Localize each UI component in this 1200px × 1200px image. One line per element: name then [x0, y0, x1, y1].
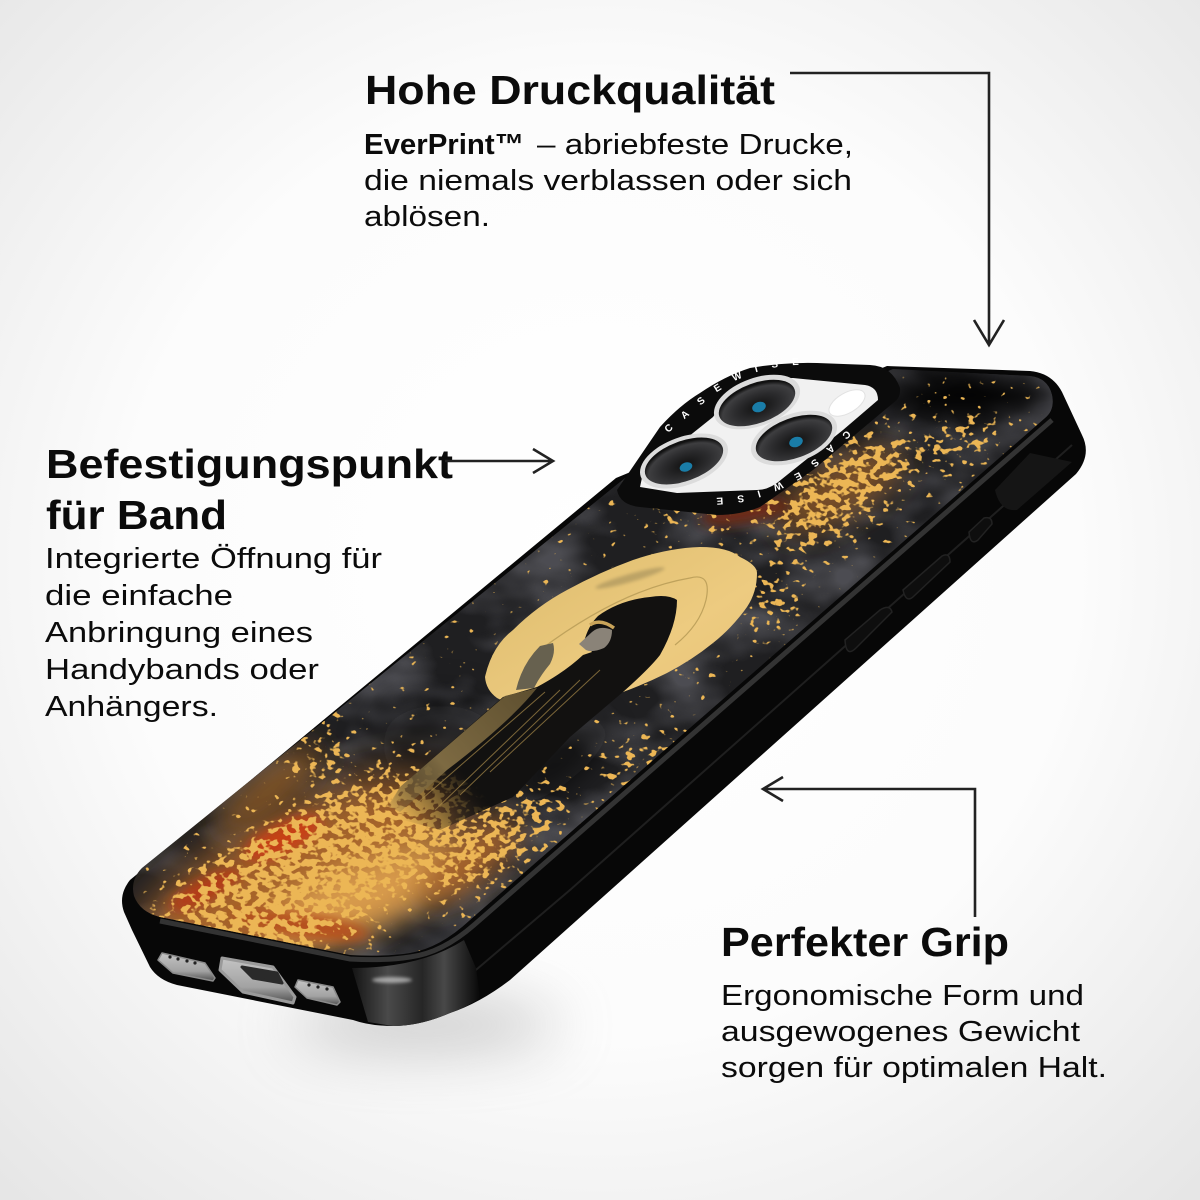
- volume button lower: [845, 607, 892, 652]
- callout: Befestigungspunkt für Band: [45, 441, 453, 723]
- golden robe sleeve: [388, 688, 537, 812]
- callout: Perfekter Grip: [721, 919, 1107, 1084]
- volume button upper: [903, 555, 950, 599]
- ring brand bottom: CASEWISE: [716, 432, 850, 505]
- body text: EverPrint™: [364, 129, 524, 161]
- body text: sorgen für optimalen Halt.: [721, 1052, 1107, 1084]
- left speaker: [158, 953, 215, 981]
- heading: Befestigungspunkt: [46, 441, 453, 487]
- body text: [721, 980, 1107, 1084]
- rim highlight: [160, 420, 1052, 960]
- praying hand: [516, 643, 554, 690]
- charging port: [220, 958, 295, 1003]
- bottom ports: [158, 953, 340, 1005]
- body text: [364, 129, 853, 233]
- corner reflection: [372, 977, 412, 983]
- port opening: [242, 967, 282, 983]
- printed artwork: [133, 369, 1053, 956]
- body text: ausgewogenes Gewicht: [721, 1016, 1080, 1048]
- ring brand top: CASEWISE: [665, 363, 798, 432]
- art colour wash: [133, 370, 1052, 956]
- callout: Hohe Druckqualität: [364, 67, 853, 233]
- lens right: [744, 400, 844, 476]
- arrow: to print surface: [790, 73, 1004, 345]
- action button: [969, 518, 992, 542]
- body text: – abriebfeste Drucke,: [537, 129, 853, 161]
- gold speckles: [113, 399, 1012, 1025]
- lens top: [707, 364, 807, 440]
- lens left: [633, 423, 735, 499]
- body text: [45, 543, 382, 723]
- crown: [590, 622, 614, 628]
- case body: [122, 366, 1086, 1026]
- heading: für Band: [46, 492, 227, 538]
- camera module: [617, 362, 900, 515]
- robe lines: [415, 670, 600, 810]
- glossy corner: [352, 940, 480, 1026]
- art clouds: [139, 369, 1053, 956]
- body text: ablösen.: [364, 201, 490, 233]
- body text: Anbringung eines: [45, 617, 313, 649]
- body text: Handybands oder: [45, 654, 319, 686]
- body text: Ergonomische Form und: [721, 980, 1084, 1012]
- side button: [995, 453, 1072, 510]
- phone case: [122, 366, 1086, 1026]
- moon engraved arc: [540, 577, 707, 650]
- heading: [46, 441, 453, 538]
- body text: Anhängers.: [45, 691, 218, 723]
- right speaker: [295, 980, 340, 1005]
- art base: [133, 369, 1034, 956]
- flash: [825, 384, 869, 422]
- phone shadow: [290, 1001, 560, 1049]
- arrow: to side grip: [763, 777, 975, 917]
- figure robe and veil: [385, 596, 677, 830]
- moon disc: [485, 547, 757, 700]
- heading: Perfekter Grip: [721, 919, 1009, 965]
- body text: Integrierte Öffnung für: [45, 543, 382, 575]
- body text: die niemals verblassen oder sich: [364, 165, 852, 197]
- heading: Hohe Druckqualität: [365, 67, 775, 113]
- face: [579, 628, 612, 651]
- moon smudge: [596, 566, 665, 590]
- body text: die einfache: [45, 580, 233, 612]
- camera ring: [617, 363, 900, 515]
- side groove: [470, 445, 1072, 975]
- arrow: to strap attachment: [445, 449, 553, 473]
- camera plate: [640, 378, 878, 493]
